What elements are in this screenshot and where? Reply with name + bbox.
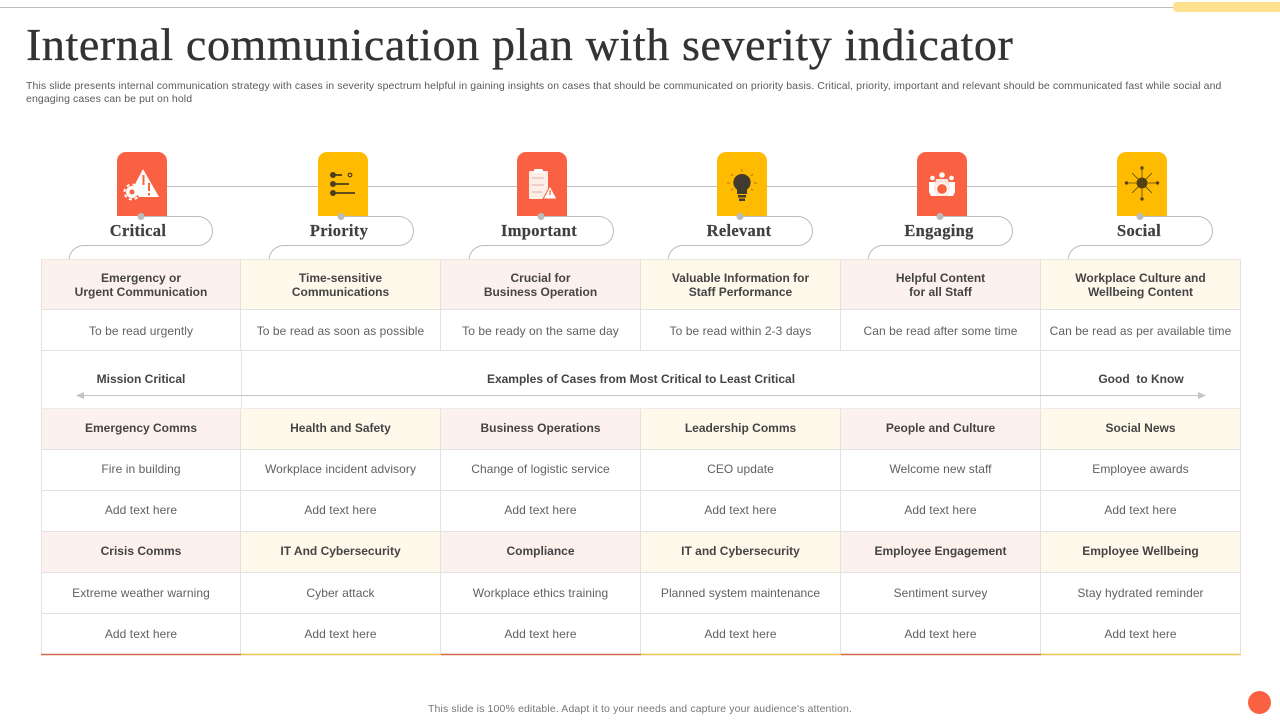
table: severity spectrum: Welcome new staff [889,462,992,476]
table: severity spectrum: IT And Cybersecurity [280,544,401,558]
table: severity spectrum: Workplace incident advisory [265,462,416,476]
label: Social: Social [1117,221,1161,240]
table: severity spectrum: Social News [1105,421,1176,435]
table: severity spectrum: Crisis Comms [101,544,181,558]
table: severity spectrum: Health and Safety [290,421,391,435]
table: severity spectrum: Add text here [704,627,777,641]
table: severity spectrum: To be read as soon as possible [257,324,424,338]
table: severity spectrum: Staff Performance [689,284,792,298]
table: severity spectrum: Planned system maintenance [661,586,820,600]
top rule and accent bar [0,2,1280,12]
table: severity spectrum: Fire in building [101,462,181,476]
table: severity spectrum: Change of logistic service [471,462,610,476]
table: severity spectrum: Compliance [506,544,574,558]
label: Engaging: Engaging [904,221,974,240]
timeline dots [138,213,1144,220]
table: severity spectrum: Employee Wellbeing [1082,544,1199,558]
table: severity spectrum: Sentiment survey [894,586,987,600]
intro text [26,80,1221,105]
table: severity spectrum: Stay hydrated reminder [1077,586,1204,600]
table: severity spectrum: Add text here [1104,627,1177,641]
table: severity spectrum: Business Operations [480,421,601,435]
table: severity spectrum: Emergency Comms [85,421,197,435]
table: severity spectrum: Employee awards [1092,462,1189,476]
table: severity spectrum: Add text here [904,503,977,517]
arrow: severity direction [76,392,1206,399]
footer note: This slide is 100% editable. Adapt it to your needs and capture your audience's attention. [428,703,852,715]
table: severity spectrum: People and Culture [886,421,995,435]
table: severity spectrum: Add text here [1104,503,1177,517]
label: Relevant: Relevant [707,221,771,240]
label: Priority: Priority [310,221,368,240]
table: severity spectrum: IT and Cybersecurity [681,544,800,558]
table: severity spectrum: Emergency or [101,270,181,284]
table: severity spectrum: Time-sensitive [299,270,382,284]
table: severity spectrum: for all Staff [909,284,972,298]
table: severity spectrum: Can be read as per available time [1050,324,1231,338]
table: severity spectrum: Crucial for [510,270,570,284]
table: severity spectrum: Add text here [504,503,577,517]
table: severity spectrum: Add text here [704,503,777,517]
timeline connectors [68,186,1213,259]
intro text: engaging cases can be put on hold [26,93,192,105]
intro text: This slide presents internal communication strategy with cases in severity spectrum helpful in gaining insights on cases that should be communicated on priority basis. Critical, priority, important and relevant should be communicated fast while social and [26,80,1221,92]
table: severity spectrum: Communications [292,284,389,298]
bottom table rule [41,654,1241,656]
table: severity spectrum: Workplace ethics training [473,586,608,600]
band heading: Good to Know: Good to Know [1098,372,1184,386]
label: Important: Important [501,221,577,240]
table: severity spectrum: Leadership Comms [685,421,796,435]
table: severity spectrum: Extreme weather warning [72,586,210,600]
icon card: social [1117,152,1167,216]
table: severity spectrum: To be read urgently [89,324,193,338]
icon card: relevant [717,152,767,216]
table: severity spectrum: Add text here [304,503,377,517]
table: severity spectrum: Add text here [105,627,177,641]
table: severity spectrum: Can be read after some time [864,324,1017,338]
table: severity spectrum: Workplace Culture and [1075,270,1206,284]
page marker dot [1248,691,1271,714]
icon card: critical [117,152,167,216]
table: severity spectrum: Add text here [904,627,977,641]
table: severity spectrum: Add text here [304,627,377,641]
table: severity spectrum: Cyber attack [306,586,375,600]
table: severity spectrum: To be read within 2-3 days [670,324,811,338]
table: severity spectrum: Urgent Communication [75,284,207,298]
band heading: Mission Critical: Mission Critical [97,372,185,386]
icon card: engaging [917,152,967,216]
table: severity spectrum: Wellbeing Content [1088,284,1193,298]
table: severity spectrum: CEO update [707,462,774,476]
table: severity spectrum: Add text here [105,503,177,517]
title: Internal communication plan with severity indicator [26,19,1013,70]
label: Critical: Critical [110,221,166,240]
band heading: Examples of Cases: Examples of Cases from Most Critical to Least Critical [487,372,795,386]
icon card: important [517,152,567,216]
table: severity spectrum: Helpful Content [896,270,985,284]
table: severity spectrum: To be ready on the same day [462,324,619,338]
table: severity spectrum: Business Operation [484,284,597,298]
icon card: priority [318,152,368,216]
table: severity spectrum: Employee Engagement [874,544,1007,558]
table: severity spectrum: Valuable Information for [672,270,809,284]
table: severity spectrum: Add text here [504,627,577,641]
